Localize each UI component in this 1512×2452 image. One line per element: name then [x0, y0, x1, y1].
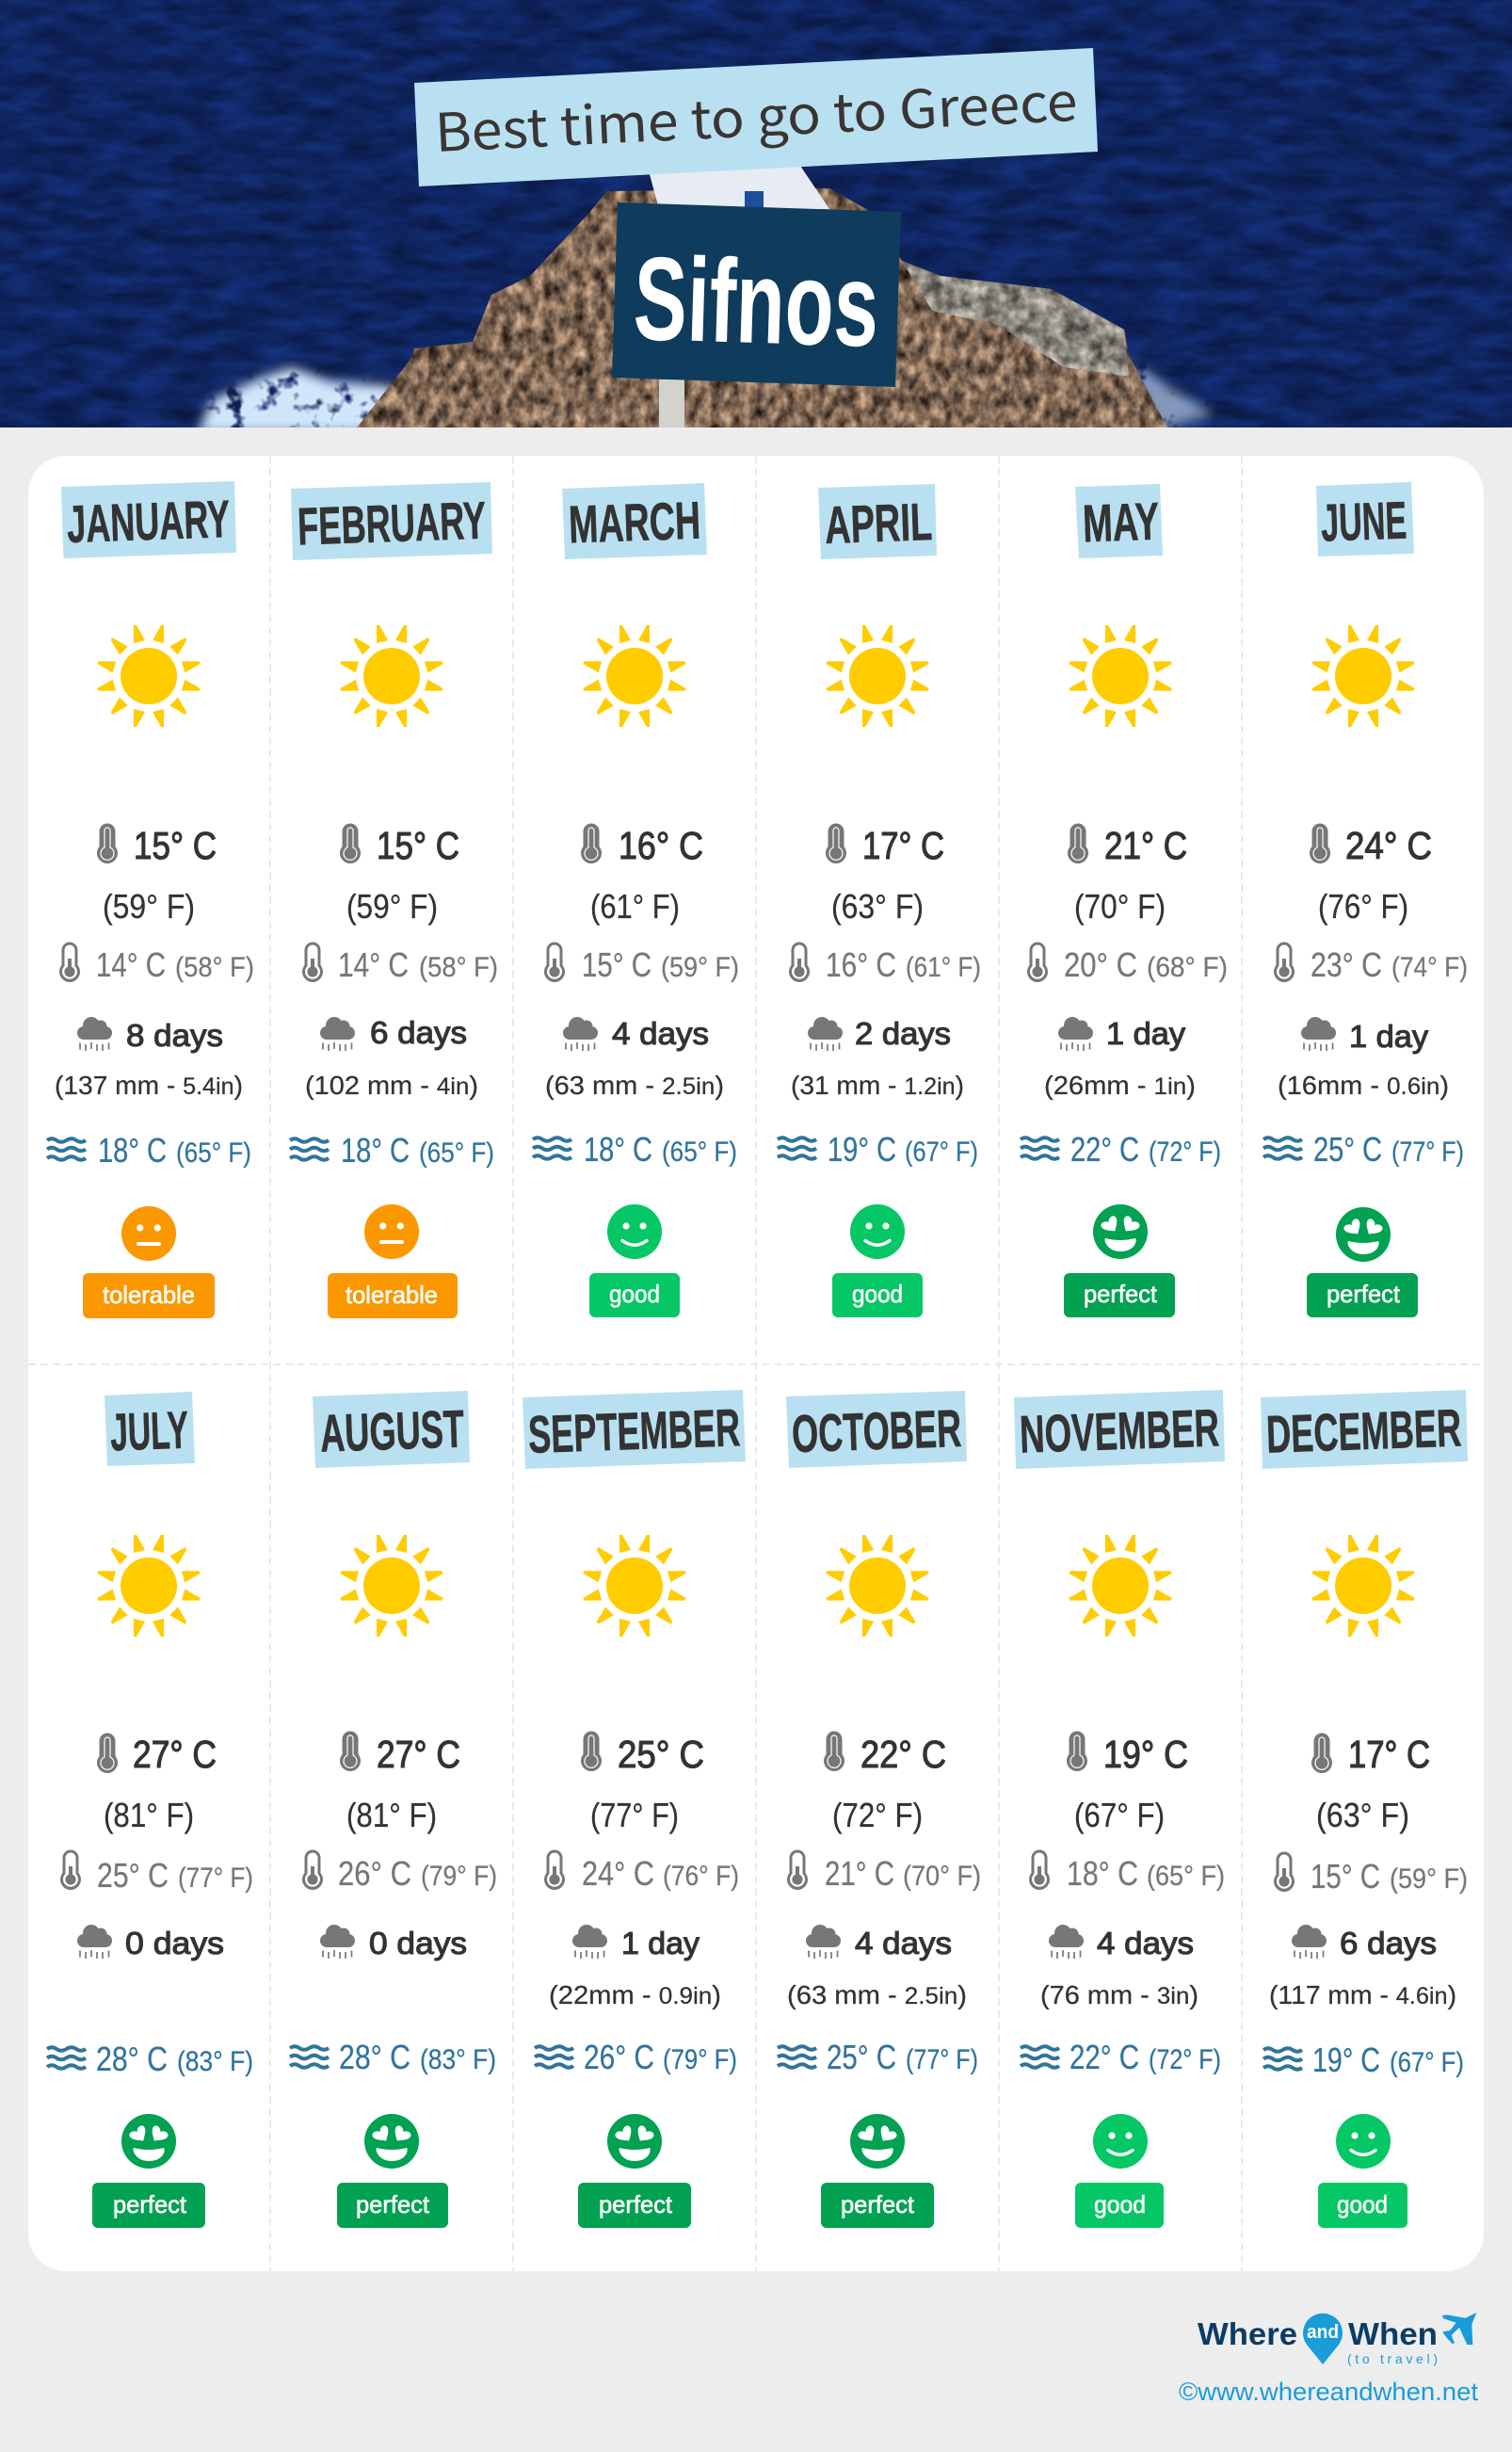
month label: November: NOVEMBER [1019, 1397, 1220, 1464]
sea temperature [1021, 1130, 1221, 1169]
month label: July [105, 1392, 195, 1466]
sea temperature [1263, 1130, 1464, 1169]
sea temperature: (67° F) [1390, 2047, 1464, 2078]
rainfall [787, 1925, 967, 2009]
sea temperature: (72° F) [1149, 1137, 1221, 1168]
month label: May [1075, 484, 1163, 558]
month label: October: OCTOBER [791, 1398, 962, 1463]
icon: sun [583, 625, 686, 727]
month column: July [47, 1392, 253, 2228]
rainfall: 1 day [621, 1926, 700, 1960]
average low temperature: (68° F) [1147, 952, 1228, 983]
rating: perfect: perfect [1084, 1280, 1158, 1308]
month label: October [786, 1391, 967, 1468]
average low temperature: 15° C [582, 945, 651, 984]
rainfall [545, 1016, 724, 1100]
average low temperature [787, 1849, 981, 1893]
average high temperature: 15° C [134, 824, 217, 867]
average high temperature: (77° F) [590, 1796, 679, 1834]
average high temperature: (59° F) [103, 887, 195, 926]
rating: good [832, 1204, 923, 1317]
average high temperature: 27° C [133, 1733, 217, 1776]
month label: June: JUNE [1320, 490, 1407, 553]
rainfall [1269, 1925, 1456, 2009]
sea temperature: (72° F) [1149, 2044, 1221, 2075]
rating: perfect [578, 2114, 691, 2228]
rainfall: 8 days [126, 1018, 223, 1053]
sea temperature: (65° F) [176, 1137, 251, 1169]
average high temperature: (81° F) [346, 1796, 437, 1834]
sea temperature: 22° C [1070, 2038, 1139, 2076]
icon: sun [97, 625, 201, 727]
month column: February [290, 482, 498, 1318]
rainfall: (22mm - 0.9in) [549, 1980, 721, 2009]
rating: good: good [1094, 2190, 1146, 2218]
sea temperature: 28° C [339, 2038, 410, 2076]
icon: sun [340, 1535, 443, 1637]
month column: April [778, 484, 981, 1317]
average low temperature: 15° C [1311, 1857, 1380, 1895]
average high temperature: (76° F) [1318, 887, 1408, 926]
average high temperature [97, 1733, 217, 1834]
average low temperature: (77° F) [178, 1863, 253, 1894]
average high temperature: 15° C [377, 824, 459, 867]
average high temperature: 17° C [1348, 1733, 1430, 1776]
sea temperature: 25° C [1313, 1130, 1382, 1169]
average high temperature: (59° F) [346, 887, 438, 926]
month label: June [1316, 482, 1414, 557]
average low temperature [60, 1849, 253, 1895]
sea temperature: 22° C [1070, 1130, 1139, 1169]
rainfall [320, 1925, 467, 1960]
icon: sun [583, 1535, 686, 1637]
rainfall: (16mm - 0.6in) [1278, 1071, 1449, 1100]
average low temperature [1274, 1851, 1468, 1895]
average low temperature: 14° C [338, 945, 409, 984]
average low temperature: 18° C [1067, 1854, 1138, 1893]
sea temperature [1021, 2038, 1221, 2076]
average low temperature: 14° C [96, 945, 166, 984]
rating: good: good [852, 1280, 903, 1308]
average high temperature [340, 823, 459, 926]
rainfall [1278, 1017, 1449, 1100]
rating: perfect [1064, 1204, 1175, 1317]
month label: March: MARCH [568, 491, 701, 554]
average low temperature: (70° F) [903, 1861, 981, 1892]
logo: Where and When [1198, 2313, 1476, 2366]
sea temperature [47, 2040, 253, 2078]
month label: April: APRIL [824, 492, 933, 555]
icon: sun [97, 1535, 201, 1637]
month column: October [778, 1391, 981, 2228]
rating: good [1318, 2114, 1407, 2228]
month label: November [1014, 1390, 1225, 1469]
average low temperature [59, 942, 254, 984]
average low temperature: 23° C [1311, 945, 1382, 984]
average low temperature [1027, 942, 1228, 984]
sea temperature [47, 1131, 251, 1170]
rainfall: (102 mm - 4in) [305, 1071, 478, 1100]
rating: perfect [92, 2114, 205, 2228]
icon: sun [1069, 625, 1172, 727]
sea temperature: (65° F) [662, 1137, 737, 1168]
rating: tolerable: tolerable [346, 1281, 438, 1309]
average low temperature [302, 1849, 497, 1893]
average low temperature: (79° F) [421, 1861, 497, 1892]
average low temperature: (74° F) [1391, 952, 1468, 983]
rating: perfect: perfect [113, 2190, 187, 2218]
average low temperature: (58° F) [419, 952, 498, 983]
month column: August [290, 1391, 497, 2228]
month label: March [562, 483, 707, 559]
rainfall: (117 mm - 4.6in) [1269, 1980, 1456, 2009]
sea temperature [778, 2038, 978, 2076]
average low temperature [1029, 1849, 1225, 1893]
month column: November [1014, 1390, 1225, 2228]
rainfall: 4 days [1097, 1926, 1194, 1960]
month label: August [313, 1391, 470, 1468]
sea temperature: (65° F) [419, 1137, 494, 1169]
rating: good [1075, 2114, 1164, 2228]
month label: September: SEPTEMBER [527, 1397, 741, 1464]
title banner [414, 48, 1098, 186]
sea temperature [1263, 2041, 1464, 2079]
rating: perfect [1307, 1207, 1418, 1317]
average high temperature [340, 1731, 460, 1834]
rainfall: 4 days [855, 1926, 952, 1960]
rainfall: 6 days [370, 1015, 467, 1050]
average low temperature: (65° F) [1147, 1861, 1225, 1892]
rainfall [549, 1925, 721, 2009]
sea temperature: 18° C [341, 1131, 410, 1170]
icon: map pin: and [1307, 2322, 1339, 2343]
average high temperature [1068, 823, 1187, 926]
sea temperature: (79° F) [663, 2044, 737, 2075]
month column: June [1263, 482, 1468, 1317]
average high temperature: (63° F) [831, 887, 924, 926]
average low temperature: 16° C [826, 945, 896, 984]
average high temperature: 27° C [377, 1733, 460, 1776]
rainfall: 0 days [125, 1926, 224, 1960]
rainfall: (63 mm - 2.5in) [787, 1980, 967, 2009]
rainfall: (137 mm - 5.4in) [55, 1071, 243, 1100]
logo: Where and When: When [1348, 2316, 1438, 2351]
rating: perfect: perfect [356, 2190, 430, 2218]
average high temperature [581, 1731, 704, 1834]
rainfall [305, 1015, 478, 1100]
average high temperature [1311, 1733, 1430, 1834]
rainfall [791, 1016, 964, 1100]
rating: perfect: perfect [841, 2190, 915, 2218]
average low temperature: 20° C [1064, 945, 1137, 984]
rainfall: 4 days [612, 1016, 709, 1051]
rainfall [1044, 1016, 1196, 1100]
destination banner: Sifnos [612, 202, 901, 387]
icon: sun [826, 625, 929, 727]
icon: sun [1311, 625, 1415, 727]
average low temperature [544, 1849, 739, 1893]
average low temperature: (59° F) [1390, 1863, 1468, 1895]
title banner: Best time to go to Greece [433, 60, 1079, 168]
sea temperature [533, 1130, 737, 1169]
rating: good [589, 1204, 680, 1317]
rainfall: 6 days [1340, 1926, 1437, 1960]
rating: good: good [609, 1280, 660, 1308]
average high temperature [97, 823, 217, 926]
icon: sun [340, 625, 443, 727]
rating: perfect: perfect [599, 2190, 673, 2218]
month column: March [533, 483, 739, 1317]
month column: December [1261, 1390, 1468, 2228]
icon: sun [1311, 1535, 1415, 1637]
average low temperature [789, 942, 981, 984]
rainfall: (63 mm - 2.5in) [545, 1071, 724, 1100]
rainfall: (76 mm - 3in) [1040, 1980, 1198, 2009]
rainfall: 0 days [369, 1926, 467, 1960]
rating: tolerable [328, 1204, 458, 1318]
month label: May: MAY [1082, 492, 1160, 553]
rainfall [77, 1925, 224, 1960]
average high temperature: (61° F) [590, 887, 680, 926]
rating: perfect [821, 2114, 934, 2228]
month column: May [1021, 484, 1228, 1317]
month label: August: AUGUST [319, 1398, 465, 1463]
average high temperature: 22° C [861, 1733, 946, 1776]
sea temperature [535, 2038, 737, 2076]
sea temperature: 19° C [828, 1130, 896, 1169]
rainfall: (26mm - 1in) [1044, 1071, 1196, 1100]
average high temperature: (63° F) [1316, 1796, 1409, 1834]
icon: sun [1069, 1535, 1172, 1637]
average high temperature: 17° C [862, 824, 944, 867]
average high temperature: (70° F) [1074, 887, 1166, 926]
month label: January: JANUARY [66, 489, 231, 554]
month label: July: JULY [109, 1400, 189, 1461]
month label: September [523, 1390, 746, 1469]
month column: January [47, 481, 254, 1318]
average high temperature: 19° C [1103, 1733, 1188, 1776]
month label: February [291, 482, 492, 560]
rainfall: 1 day [1106, 1016, 1186, 1051]
average high temperature: 21° C [1104, 824, 1187, 867]
average low temperature: 25° C [97, 1856, 169, 1895]
rainfall: (31 mm - 1.2in) [791, 1071, 964, 1100]
icon: sun [826, 1535, 929, 1637]
average low temperature: 21° C [825, 1854, 894, 1893]
average low temperature: (61° F) [906, 952, 981, 983]
rating: tolerable [83, 1206, 215, 1318]
sea temperature: (67° F) [905, 1137, 978, 1168]
month label: February: FEBRUARY [297, 491, 487, 556]
average low temperature [544, 942, 739, 984]
rating: perfect: perfect [1327, 1280, 1401, 1308]
rating: perfect [337, 2114, 448, 2228]
average high temperature [581, 823, 703, 926]
sea temperature [778, 1130, 978, 1169]
average high temperature: (81° F) [104, 1796, 194, 1834]
icon: plane [1442, 2313, 1476, 2345]
sea temperature [290, 2038, 496, 2076]
logo: Where and When: (to travel) [1347, 2351, 1438, 2366]
sea temperature: (77° F) [906, 2044, 978, 2075]
sea temperature: 26° C [584, 2038, 654, 2076]
sea temperature: 28° C [96, 2040, 168, 2078]
sea temperature: 25° C [827, 2038, 896, 2076]
panel: calendar card [28, 456, 1484, 2271]
average high temperature: 25° C [618, 1733, 704, 1776]
sea temperature: 19° C [1312, 2041, 1380, 2079]
sea temperature [290, 1131, 494, 1170]
month column: September [523, 1390, 746, 2228]
month label: January [61, 481, 236, 558]
header photo: sea and rocky headland [0, 0, 1512, 433]
average high temperature: (67° F) [1074, 1796, 1165, 1834]
average low temperature [1274, 942, 1468, 984]
rainfall [1040, 1925, 1198, 2009]
month label: April [818, 484, 937, 559]
average high temperature [824, 1731, 946, 1834]
icon: map pin [1303, 2314, 1343, 2364]
sea temperature: (83° F) [177, 2046, 253, 2077]
average low temperature: (58° F) [175, 952, 254, 983]
rating: good: good [1337, 2190, 1388, 2218]
logo: Where and When: Where [1198, 2316, 1297, 2351]
rating: tolerable: tolerable [103, 1281, 195, 1309]
average low temperature: (76° F) [663, 1861, 739, 1892]
average high temperature [1310, 823, 1432, 926]
average low temperature: 26° C [338, 1854, 411, 1893]
sea temperature: (77° F) [1391, 1137, 1464, 1168]
sea temperature: (83° F) [420, 2044, 496, 2075]
average high temperature [826, 823, 944, 926]
average high temperature: (72° F) [832, 1796, 923, 1834]
average low temperature: (59° F) [661, 952, 739, 983]
average low temperature [302, 942, 498, 984]
destination banner: Sifnos: Sifnos [632, 232, 880, 372]
rainfall: 2 days [855, 1016, 951, 1051]
rainfall: 1 day [1349, 1019, 1429, 1054]
website credit: ©www.whereandwhen.net [1179, 2378, 1478, 2406]
sea temperature: 18° C [584, 1130, 652, 1169]
average high temperature: 16° C [619, 824, 703, 867]
rainfall [55, 1017, 243, 1100]
average low temperature: 24° C [582, 1854, 654, 1893]
average high temperature [1067, 1731, 1188, 1834]
average high temperature: 24° C [1345, 824, 1432, 867]
sea temperature: 18° C [98, 1131, 167, 1170]
